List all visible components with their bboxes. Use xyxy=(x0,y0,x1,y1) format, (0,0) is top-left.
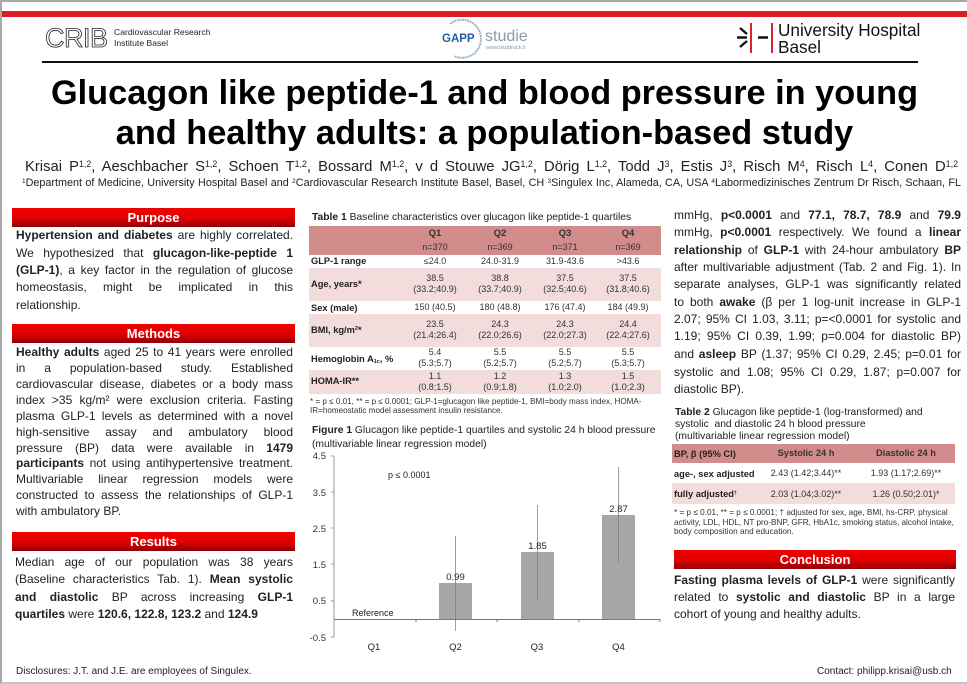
panel: results continued: 1.19; 95% CI 0.39, 1.99; p=0.004 for diastolic BP) xyxy=(674,329,961,343)
conclusion text: related to systolic and diastolic BP in a large xyxy=(674,590,955,604)
row: BMI: 24.4 xyxy=(619,319,637,329)
panel: results continued: systolic and 1.08; 95% CI 0.29, 1.87; p=0.007 for xyxy=(674,365,961,379)
row: BMI: (22.0;27.3) xyxy=(543,330,587,340)
row: sex: 176 (47.4) xyxy=(544,302,586,312)
x labels: Q4 xyxy=(612,642,625,653)
table 1 header row: n=369 xyxy=(487,242,513,252)
y axis: 0.5 xyxy=(313,596,326,607)
row: hemoglobin: 5.4 xyxy=(429,347,441,357)
results text: (Baseline characteristics Tab. 1). Mean systolic xyxy=(15,572,293,586)
panel: results continued: relationship of GLP-1 with 24-hour ambulatory BP xyxy=(674,243,961,257)
panel: results continued: separate analyses, GLP-1 was significantly related xyxy=(674,277,961,291)
methods text: plasma GLP-1 levels as determined with a novel xyxy=(16,409,293,423)
table 2 xyxy=(672,407,955,536)
p value: p ≤ 0.0001 xyxy=(388,470,430,480)
table 2 header row: Systolic 24 h xyxy=(778,448,834,458)
table 1 header row: n=371 xyxy=(552,242,578,252)
authors: Krisai P1,2, Aeschbacher S1,2, Schoen T1,2, Bossard M1,2, v d Stouwe JG1,2, Dörig L1,2, Todd J3, Estis J3, Risch M4, Risch L4, Conen D1,2 xyxy=(25,159,958,175)
purpose text: homeostasis, might be implicated in this xyxy=(16,280,293,294)
row: sex xyxy=(311,302,649,313)
row: age: Age, years* xyxy=(311,279,362,289)
row: hemoglobin: 5.5 xyxy=(622,347,634,357)
methods heading xyxy=(12,324,295,343)
x labels: Q1 xyxy=(368,642,380,653)
row: age: (31.8;40.6) xyxy=(606,284,650,294)
CRIB institute name: Cardiovascular Research xyxy=(114,27,210,37)
table 1 xyxy=(309,212,661,414)
row: HOMA-IR: 1.2 xyxy=(494,371,506,381)
y axis: 1.5 xyxy=(313,560,326,571)
purpose text: We hypothesized that glucagon-like-peptide 1 xyxy=(16,246,293,260)
conclusion heading: Conclusion xyxy=(780,552,850,567)
row: age: (32.5;40.6) xyxy=(543,284,587,294)
USB name: University Hospital xyxy=(778,20,920,40)
y axis: 3.5 xyxy=(313,488,326,499)
table 2 caption: systolic and diastolic 24 h blood pressure xyxy=(675,419,866,430)
panel: results continued: to both awake (β per 1 log-unit increase in GLP-1 xyxy=(674,295,961,309)
conclusion heading xyxy=(674,550,956,569)
table 1 header row: Q4 xyxy=(622,228,634,239)
table 2 header row: BP, β (95% CI) xyxy=(674,449,736,459)
panel: results continued: after multivariable adjustment (Tab. 2 and Fig. 1). In xyxy=(674,260,961,274)
row: hemoglobin: 5.5 xyxy=(494,347,506,357)
row: HOMA-IR xyxy=(309,370,661,394)
row: age: 37.5 xyxy=(556,273,574,283)
CRIB lettering: CRIB xyxy=(45,23,108,53)
row: HOMA-IR: (1.0;2.0) xyxy=(548,382,582,392)
panel: results continued: 2.07; 95% CI 1.03, 3.11; p=<0.0001 for systolic and xyxy=(674,312,961,326)
table 1 caption: Table 1 Baseline characteristics over glucagon like peptide-1 quartiles xyxy=(312,212,631,223)
table 2 footnote: activity, LDL, HDL, NT pro-BNP, GFR, HbA1c, smoking status, alcohol intake, xyxy=(674,518,954,526)
purpose heading: Purpose xyxy=(127,210,180,225)
row: hemoglobin: (5.2;5.7) xyxy=(483,358,517,368)
panel: conclusion xyxy=(674,550,956,621)
title: and healthy adults: a population-based study xyxy=(116,114,853,152)
row: age-, sex adjusted: age-, sex adjusted xyxy=(674,469,755,479)
methods text: high-sensitive assay and ambulatory blood xyxy=(16,425,293,439)
purpose text: relationship. xyxy=(16,298,81,312)
results text: and diastolic BP across increasing GLP-1 xyxy=(15,590,293,604)
table 1 header row: Q2 xyxy=(494,228,506,239)
header divider xyxy=(42,61,918,63)
y axis: 4.5 xyxy=(313,451,326,462)
table 2 header row: Diastolic 24 h xyxy=(876,448,936,458)
table 2 footnote xyxy=(674,508,954,536)
row: age xyxy=(309,268,661,301)
error bars xyxy=(456,467,618,631)
row: age-, sex adjusted xyxy=(674,468,942,479)
row: sex: 180 (48.8) xyxy=(479,302,521,312)
table 1 header row: Q3 xyxy=(559,228,571,239)
results text: quartiles were 120.6, 122.8, 123.2 and 124.9 xyxy=(15,607,258,621)
row: age: 38.5 xyxy=(426,273,444,283)
logo: University Hospital Basel xyxy=(737,20,920,57)
table 2 caption: Table 2 Glucagon like peptide-1 (log-transformed) and xyxy=(675,407,923,418)
row: sex: 184 (49.9) xyxy=(607,302,649,312)
table 1 footnote: IR=homeostatic model assessment insulin resistance. xyxy=(310,406,503,414)
title: Glucagon like peptide-1 and blood pressure in young xyxy=(51,74,918,112)
CRIB institute name xyxy=(114,27,210,48)
row: age-, sex adjusted: 1.93 (1.17;2.69)** xyxy=(871,468,941,478)
methods text: Healthy adults aged 25 to 41 years were enrolled xyxy=(16,345,293,359)
conclusion text xyxy=(674,573,955,621)
row: age: 38.8 xyxy=(491,273,509,283)
USB mark xyxy=(737,23,773,53)
methods text: constructed to assess the relationships of GLP-1 xyxy=(16,488,293,502)
bar values: 0.99 xyxy=(446,572,465,583)
row: fully adjusted: 1.26 (0.50;2.01)* xyxy=(872,489,940,499)
row: GLP-1 range: ≤24.0 xyxy=(424,256,446,266)
table 2 footnote: body composition and education. xyxy=(674,527,794,536)
GAPP url: www.blutdruck.li xyxy=(486,45,525,51)
methods text: in a population-based study. Established xyxy=(16,361,293,375)
USB name: Basel xyxy=(778,37,821,57)
row: GLP-1 range xyxy=(311,256,639,266)
affiliations: 1Department of Medicine, University Hospital Basel and 2Cardiovascular Research Institute Basel, Basel, CH 3Singulex Inc, Alameda, CA, USA 4Labormedizinisches Zentrum Dr Risch, Schaan, FL xyxy=(22,177,961,189)
row: BMI: 24.3 xyxy=(556,319,574,329)
row: GLP-1 range: >43.6 xyxy=(617,256,639,266)
bar chart: GLP-1 quartiles vs systolic BP xyxy=(310,451,660,653)
panel: results continued: mmHg, p<0.0001 and 77.1, 78.7, 78.9 and 79.9 xyxy=(674,208,961,222)
bar values: 1.85 xyxy=(528,541,547,552)
panel: purpose xyxy=(12,208,295,312)
figure 1 caption: (multivariable linear regression model) xyxy=(312,438,487,450)
row: BMI: 24.3 xyxy=(491,319,509,329)
row: BMI: 23.5 xyxy=(426,319,444,329)
title xyxy=(51,74,918,152)
row: HOMA-IR: (0.9;1.8) xyxy=(483,382,517,392)
GAPP word: GAPP xyxy=(442,33,475,45)
row: fully adjusted: fully adjusted† xyxy=(674,489,737,499)
table 2 footnote: * = p ≤ 0.01, ** = p ≤ 0.0001; † adjusted for sex, age, BMI, hs-CRP, physical xyxy=(674,508,948,517)
red top band xyxy=(2,11,967,17)
row: HOMA-IR: 1.5 xyxy=(622,371,634,381)
x axis xyxy=(334,619,660,622)
conclusion text: cohort of young and healthy adults. xyxy=(674,607,861,621)
table 2 caption: (multivariable linear regression model) xyxy=(675,431,850,442)
row: HOMA-IR: 1.3 xyxy=(559,371,571,381)
x labels: Q2 xyxy=(449,642,462,653)
table 1 header row xyxy=(309,226,661,255)
reference label: Reference xyxy=(352,608,394,618)
results text: Median age of our population was 38 years xyxy=(15,555,293,569)
row: hemoglobin: 5.5 xyxy=(559,347,571,357)
row: hemoglobin: (5.2;5.7) xyxy=(548,358,582,368)
bars xyxy=(439,515,635,619)
figure 1 caption xyxy=(312,425,655,450)
panel: results xyxy=(12,532,295,621)
methods text: cardiovascular disease, diabetes or a body mass xyxy=(16,377,293,391)
studie word: studie xyxy=(485,28,528,45)
row: GLP-1 range: 31.9-43.6 xyxy=(546,256,584,266)
purpose text xyxy=(16,228,293,312)
table 1 footnote: * = p ≤ 0.01, ** = p ≤ 0.0001; GLP-1=glucagon like peptide-1, BMI=body mass index, HOMA- xyxy=(310,397,641,406)
y axis: -0.5 xyxy=(310,633,326,644)
row: sex: 150 (40.5) xyxy=(414,302,456,312)
table 2 caption xyxy=(675,407,923,442)
methods text: pressure (BP) data were available in 1479 xyxy=(16,441,293,455)
row: BMI: (22.0;26.6) xyxy=(478,330,522,340)
logo: GAPP studie xyxy=(442,18,528,59)
table 1 footnote xyxy=(310,397,642,414)
panel: results continued: mmHg, p<0.0001 respectively. We found a linear xyxy=(674,225,961,239)
USB name xyxy=(778,20,920,57)
row: age: (33.2;40.9) xyxy=(413,284,457,294)
table 2 header row xyxy=(672,444,955,463)
row: GLP-1 range: GLP-1 range xyxy=(311,256,366,266)
row: BMI: (21.4;26.4) xyxy=(413,330,457,340)
row: hemoglobin: (5.3;5.7) xyxy=(611,358,645,368)
methods text: index >35 kg/m² were exclusion criteria. Fasting xyxy=(16,393,293,407)
bar values: 2.87 xyxy=(609,504,628,515)
row: BMI xyxy=(309,314,661,347)
x labels: Q3 xyxy=(531,642,543,653)
methods heading: Methods xyxy=(127,326,180,341)
purpose heading xyxy=(12,208,295,227)
row: hemoglobin: Hemoglobin A1c, % xyxy=(311,354,393,365)
GAPP arc xyxy=(450,18,482,59)
methods text: with ambulatory BP. xyxy=(16,504,121,518)
row: GLP-1 range: 24.0-31.9 xyxy=(481,256,519,266)
CRIB institute name: Institute Basel xyxy=(114,38,168,48)
y axis: 2.5 xyxy=(313,524,326,535)
table 1 header row: Q1 xyxy=(429,228,441,239)
row: HOMA-IR: (0.8;1.5) xyxy=(418,382,452,392)
row: hemoglobin: (5.3;5.7) xyxy=(418,358,452,368)
methods text xyxy=(16,345,293,518)
panel: methods xyxy=(12,324,295,518)
y axis xyxy=(310,451,334,644)
x labels xyxy=(368,642,625,653)
figure 1 caption: Figure 1 Glucagon like peptide-1 quartiles and systolic 24 h blood pressure xyxy=(312,425,655,436)
results heading xyxy=(12,532,295,551)
panel: results continued: diastolic BP). xyxy=(674,382,744,396)
row: fully adjusted xyxy=(672,483,955,504)
row: age: (33.7;40.9) xyxy=(478,284,522,294)
row: BMI: (22.4;27.6) xyxy=(606,330,650,340)
results heading: Results xyxy=(130,534,177,549)
purpose text: (GLP-1), a key factor in the regulation of glucose xyxy=(16,263,293,277)
panel: results continued xyxy=(674,208,961,396)
row: HOMA-IR: (1.0;2.3) xyxy=(611,382,645,392)
row: BMI: BMI, kg/m²* xyxy=(311,325,362,335)
row: age: 37.5 xyxy=(619,273,637,283)
disclosures: Disclosures: J.T. and J.E. are employees of Singulex. xyxy=(16,666,252,677)
panel: results continued: and asleep BP (1.37; 95% CI 0.29, 2.45; p=0.01 for xyxy=(674,347,961,361)
purpose text: Hypertension and diabetes are highly correlated. xyxy=(16,228,293,242)
logo: CRIB xyxy=(45,23,210,53)
row: fully adjusted: 2.03 (1.04;3.02)** xyxy=(771,489,841,499)
methods text: participants not using antihypertensive treatment. xyxy=(16,456,293,470)
contact: Contact: philipp.krisai@usb.ch xyxy=(817,666,952,677)
table 1 header row: n=369 xyxy=(615,242,641,252)
row: hemoglobin xyxy=(311,347,645,368)
row: HOMA-IR: 1.1 xyxy=(429,371,441,381)
row: HOMA-IR: HOMA-IR** xyxy=(311,376,359,386)
conclusion text: Fasting plasma levels of GLP-1 were significantly xyxy=(674,573,955,587)
row: age-, sex adjusted: 2.43 (1.42;3.44)** xyxy=(771,468,841,478)
row: sex: Sex (male) xyxy=(311,303,358,313)
methods text: Multivariable linear regression models were xyxy=(16,472,293,486)
table 1 header row: n=370 xyxy=(422,242,448,252)
bar values xyxy=(446,504,628,583)
results text xyxy=(15,555,293,621)
